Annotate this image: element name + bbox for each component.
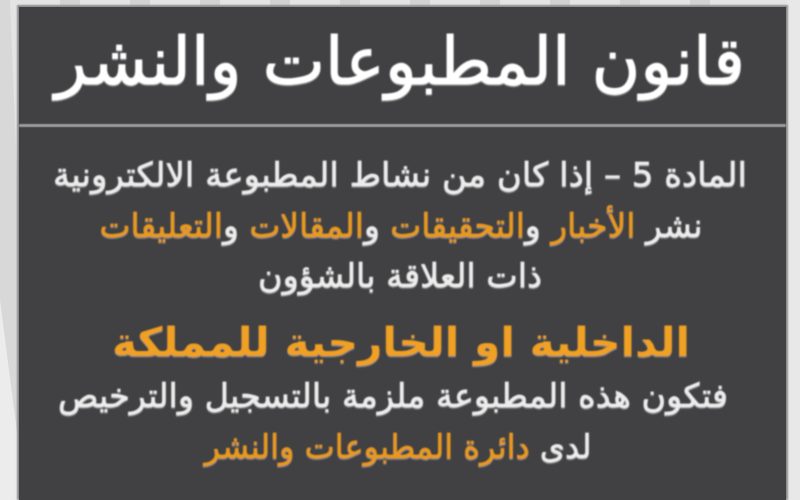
line: highlighted terms: نشر الأخبار والتحقيقات والمقالات والتعليقات [99,205,703,245]
line: registration: فتكون هذه المطبوعة ملزمة بالتسجيل والترخيص [58,376,728,416]
highlighted heading: الداخلية او الخارجية للمملكة [112,320,690,366]
title: قانون المطبوعات والنشر [52,23,745,100]
line: related affairs: ذات العلاقة بالشؤون [258,256,542,295]
line: department: لدى دائرة المطبوعات والنشر [203,427,592,466]
line: article opening: المادة 5 – إذا كان من نشاط المطبوعة الالكترونية [53,155,747,195]
text block: licensing requirement [58,376,728,466]
text block: article 5 [53,155,747,295]
